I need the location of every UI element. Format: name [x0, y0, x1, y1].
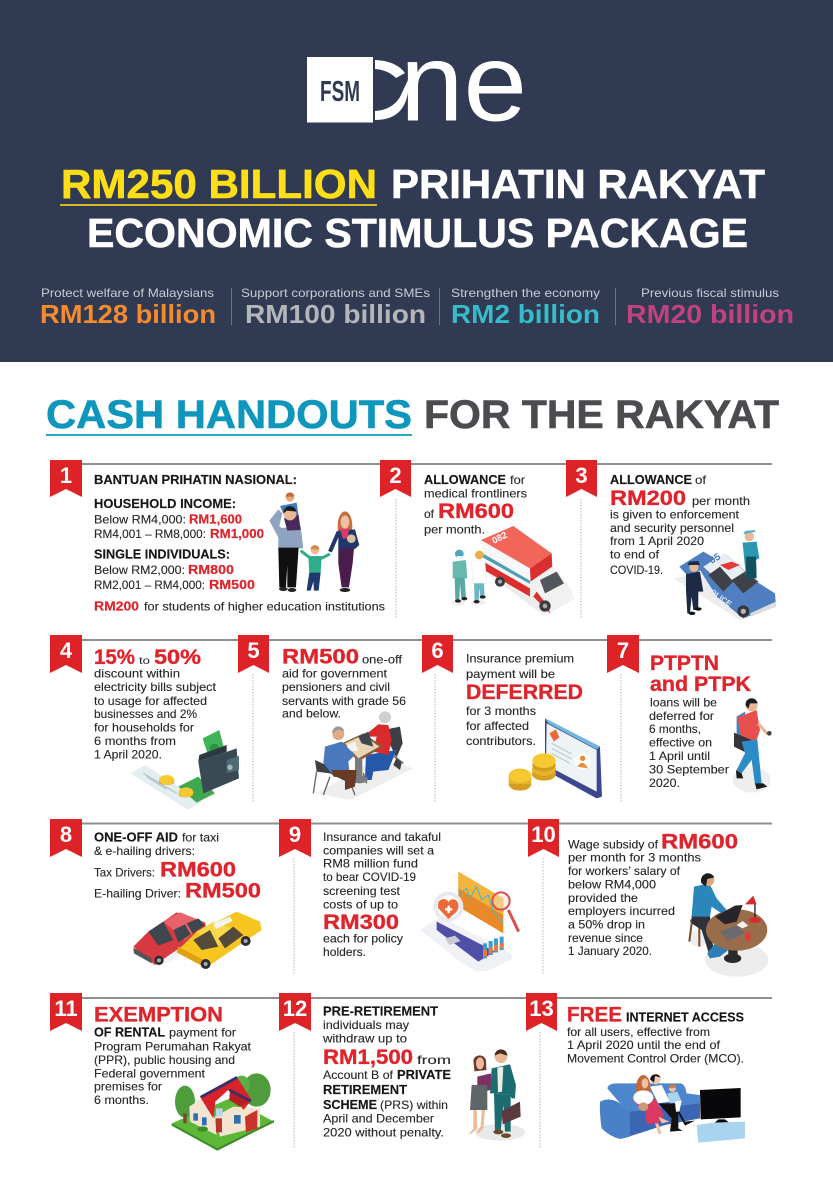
stat: previous stimulus: Previous fiscal stimulus: [641, 287, 779, 300]
text: household and single individual amounts: RM1,000: [210, 526, 264, 541]
text: allowance for medical frontliners: ALLOWANCE: [424, 473, 506, 487]
text: loans deferred: deferred for: [649, 710, 714, 723]
stat: strengthen economy: [451, 287, 600, 329]
text: free internet access: [567, 1004, 744, 1066]
logo: FSM One: ne: [400, 22, 527, 144]
text: electricity discount: 15%: [94, 646, 135, 669]
text: free internet access: Movement Control Order (MCO).: [567, 1053, 744, 1066]
text: loans deferred: [649, 652, 751, 790]
text: one-off aid for pensioners: [282, 646, 406, 721]
text: wage subsidy details: Wage subsidy of: [568, 838, 659, 851]
text: electricity discount: electricity bills subject: [94, 681, 217, 694]
text: allowance for medical frontliners: of: [424, 508, 435, 521]
text: loans deferred: 1 April until: [649, 750, 710, 763]
text: PRS withdrawal: 2020 without penalty.: [323, 1127, 444, 1140]
text: allowance for enforcement personnel: RM200: [610, 487, 686, 510]
text: allowance for medical frontliners: RM600: [438, 500, 514, 523]
text: household and single individual amounts: HOUSEHOLD INCOME:: [94, 497, 236, 511]
text: allowance for enforcement personnel: per month: [692, 495, 750, 508]
text: electricity discount: [94, 646, 217, 762]
text: insurance fund for screening: screening test: [323, 885, 401, 898]
icon: ambulance and doctors: [452, 526, 575, 615]
text: exemption of rental: payment for: [169, 1027, 236, 1040]
ribbon 13: [526, 993, 557, 1031]
text: wage subsidy details: per month for 3 months: [568, 852, 701, 865]
icon: pensioners playing chess: [313, 711, 413, 800]
text: premium deferred: for affected: [466, 720, 529, 733]
text: one-off aid for drivers: & e-hailing drivers:: [94, 845, 195, 858]
text: premium deferred: Insurance premium: [466, 653, 574, 666]
text: PRS withdrawal: RETIREMENT: [323, 1083, 407, 1097]
icon: family: [269, 492, 359, 592]
text: household and single individual amounts: RM800: [188, 562, 234, 577]
ribbon 6: 6: [431, 638, 444, 663]
text: household and single individual amounts: SINGLE INDIVIDUALS:: [94, 548, 230, 562]
text: wage subsidy details: employers incurred: [568, 905, 675, 918]
text: premium deferred: DEFERRED: [466, 681, 583, 704]
text: free internet access: for all users, effective from: [567, 1026, 710, 1039]
ribbon 12: [279, 993, 311, 1031]
text: free internet access: INTERNET ACCESS: [626, 1011, 744, 1025]
text: allowance for enforcement personnel: from 1 April 2020: [610, 535, 704, 548]
text: wage subsidy details: provided the: [568, 892, 638, 905]
ribbon 1: [50, 460, 82, 497]
text: household and single individual amounts: BANTUAN PRIHATIN NASIONAL:: [94, 473, 297, 487]
text: loans deferred: and PTPK: [650, 673, 751, 696]
ribbon 6: [422, 635, 453, 673]
text: insurance fund for screening: companies will set a: [323, 844, 435, 857]
panel 4: electricity discount: [50, 635, 239, 810]
ribbon 5: [238, 635, 269, 673]
text: one-off aid for drivers: E-hailing Driver:: [94, 888, 181, 901]
text: one-off aid for pensioners: servants with grade 56: [282, 695, 406, 708]
text: PRS withdrawal: SCHEME: [323, 1098, 377, 1112]
ribbon 9: 9: [289, 822, 301, 847]
text: insurance fund for screening: [323, 831, 441, 959]
ribbon 10: [528, 819, 559, 857]
text: premium deferred: payment will be: [466, 668, 555, 681]
text: insurance fund for screening: RM8 million fund: [323, 858, 418, 871]
header band: [0, 0, 833, 362]
ribbon 5: 5: [247, 638, 260, 663]
text: wage subsidy details: revenue since: [568, 932, 643, 945]
text: insurance fund for screening: each for policy: [323, 933, 403, 946]
ribbon 13: 13: [529, 996, 554, 1021]
text: household and single individual amounts: RM2,001 – RM4,000:: [94, 579, 205, 592]
ribbon 4: [50, 635, 82, 673]
text: loans deferred: 2020.: [649, 777, 680, 790]
icon: red car and yellow taxi: [133, 912, 262, 969]
stat: support corporations: [241, 287, 430, 329]
panel 8: taxi and e-hailing drivers: [50, 819, 262, 969]
text: insurance fund for screening: Insurance and takaful: [323, 831, 441, 844]
stat: previous stimulus: RM20 billion: [626, 299, 794, 329]
ribbon 4: 4: [60, 638, 73, 663]
text: loans deferred: PTPTN: [650, 652, 719, 675]
ribbon 7: 7: [617, 638, 629, 663]
icon: business couple: [468, 1049, 525, 1141]
text: allowance for enforcement personnel: and security personnel: [610, 522, 734, 535]
ribbon 11: [50, 993, 82, 1031]
text: loans deferred: 6 months,: [649, 723, 701, 736]
text: one-off aid for drivers: Tax Drivers:: [94, 867, 155, 880]
ribbon 7: [607, 635, 639, 673]
text: exemption of rental: [94, 1004, 252, 1107]
stat: support corporations: RM100 billion: [245, 299, 426, 329]
text: exemption of rental: (PPR), public housing and: [94, 1054, 235, 1067]
section heading: FOR THE RAKYAT: [424, 393, 779, 437]
text: premium deferred: [466, 653, 583, 748]
text: one-off aid for drivers: RM500: [185, 880, 261, 903]
icon: house with trees: [172, 1073, 274, 1151]
text: loans deferred: effective on: [649, 737, 712, 750]
text: exemption of rental: premises for: [94, 1081, 162, 1094]
text: exemption of rental: EXEMPTION: [94, 1004, 223, 1027]
text: household and single individual amounts: RM4,001 – RM8,000:: [94, 528, 206, 541]
text: loans deferred: loans will be: [650, 697, 717, 710]
icon: person working at a table: [689, 873, 768, 977]
text: allowance for enforcement personnel: of: [695, 474, 707, 487]
text: electricity discount: 1 April 2020.: [94, 749, 162, 762]
text: household and single individual amounts: Below RM2,000:: [94, 564, 185, 577]
text: exemption of rental: Program Perumahan Rakyat: [94, 1041, 252, 1054]
text: wage subsidy details: [568, 830, 738, 958]
text: PRS withdrawal: Account B of: [323, 1069, 394, 1082]
text: exemption of rental: 6 months.: [94, 1094, 149, 1107]
text: one-off aid for drivers: [94, 831, 261, 903]
text: PRS withdrawal: RM1,500: [323, 1046, 413, 1069]
text: household and single individual amounts: for students of higher education institutions: [144, 601, 385, 614]
stat: protect welfare: [40, 287, 216, 329]
text: electricity discount: discount within: [94, 668, 180, 681]
text: allowance for medical frontliners: for: [510, 474, 525, 487]
text: insurance fund for screening: costs of up to: [323, 898, 398, 911]
icon: family watching TV on a sofa: [600, 1074, 745, 1143]
text: PRS withdrawal: April and December: [323, 1113, 434, 1126]
panel 1: Bantuan Prihatin Nasional: [50, 460, 385, 614]
ribbon 8: 8: [60, 822, 72, 847]
ribbon 3: 3: [575, 463, 588, 488]
text: exemption of rental: OF RENTAL: [94, 1026, 165, 1040]
text: premium deferred: contributors.: [466, 735, 536, 748]
text: free internet access: FREE: [567, 1004, 622, 1027]
logo: FSM One: [307, 22, 527, 144]
text: free internet access: 1 April 2020 until the end of: [567, 1039, 721, 1052]
text: insurance fund for screening: RM300: [323, 911, 399, 934]
text: PRS withdrawal: from: [417, 1054, 451, 1067]
ribbon 10: 10: [531, 822, 556, 847]
ribbon 11: 11: [54, 996, 78, 1021]
text: household and single individual amounts: [94, 473, 385, 614]
text: wage subsidy details: for workers’ salary of: [568, 865, 681, 878]
panel 12: pre-retirement withdrawal: [279, 993, 525, 1141]
text: electricity discount: 50%: [154, 646, 201, 669]
text: one-off aid for pensioners: pensioners and civil: [282, 681, 390, 694]
icon: wallet, cash and coins: [131, 730, 239, 810]
icon: insurance tablet and coins: [509, 718, 602, 798]
panel 13: free internet access: [526, 993, 745, 1143]
text: one-off aid for pensioners: one-off: [362, 654, 403, 666]
text: loans deferred: 30 September: [649, 764, 729, 777]
text: one-off aid for pensioners: and below.: [282, 708, 341, 721]
text: wage subsidy details: a 50% drop in: [568, 918, 645, 931]
panel 9: COVID-19 screening fund: [279, 819, 519, 972]
text: allowance for medical frontliners: per month.: [424, 524, 485, 536]
text: electricity discount: for households for: [94, 722, 194, 735]
stat: strengthen economy: RM2 billion: [451, 299, 600, 329]
icon: police car and officers: [673, 530, 777, 620]
text: wage subsidy details: RM600: [661, 830, 738, 853]
panel 7: PTPTN and PTPK: [607, 635, 772, 793]
text: allowance for medical frontliners: medical frontliners: [424, 488, 527, 501]
ribbon 3: [566, 460, 597, 497]
text: PRS withdrawal: individuals may: [323, 1019, 409, 1032]
text: allowance for enforcement personnel: [610, 473, 750, 577]
text: electricity discount: to: [139, 655, 150, 667]
text: PRS withdrawal: PRIVATE: [397, 1068, 451, 1082]
text: electricity discount: 6 months from: [94, 735, 176, 748]
text: PRS withdrawal: (PRS) within: [380, 1099, 448, 1112]
text: premium deferred: for 3 months: [466, 705, 536, 718]
text: one-off aid for drivers: for taxi: [182, 832, 219, 845]
text: one-off aid for drivers: RM600: [160, 859, 236, 882]
text: household and single individual amounts: RM200: [94, 599, 139, 614]
text: allowance for enforcement personnel: COVID-19.: [610, 564, 663, 577]
text: PRS withdrawal: [322, 1005, 451, 1140]
text: household and single individual amounts: RM500: [209, 577, 255, 592]
ribbon 1: 1: [60, 463, 72, 488]
text: household and single individual amounts: RM1,600: [189, 512, 242, 526]
title: PRIHATIN RAKYAT: [391, 161, 765, 207]
icon: ambulance and doctors: 082: [490, 530, 509, 546]
text: one-off aid for pensioners: RM500: [282, 646, 359, 668]
logo: FSM One: FSM: [320, 76, 360, 108]
icon: laptop with heart rate screening: [420, 872, 519, 972]
ribbon 8: [50, 819, 82, 857]
section heading: [46, 393, 779, 437]
icon: police car and officers: 05: [708, 551, 723, 567]
panel 10: wage subsidy: [528, 819, 768, 977]
section heading: CASH HANDOUTS: [46, 393, 412, 437]
ribbon 9: [279, 819, 311, 857]
text: wage subsidy details: below RM4,000: [568, 878, 656, 891]
stat: protect welfare: Protect welfare of Malaysians: [41, 287, 214, 300]
ribbon 2: [380, 460, 411, 497]
panel 5: pensioners aid: [238, 635, 413, 800]
text: PRS withdrawal: PRE-RETIREMENT: [323, 1005, 438, 1019]
icon: police car and officers: POLICE: [704, 584, 734, 609]
text: household and single individual amounts: Below RM4,000:: [94, 514, 186, 526]
ribbon 12: 12: [283, 996, 307, 1021]
text: allowance for enforcement personnel: ALLOWANCE: [610, 473, 692, 487]
text: wage subsidy details: 1 January 2020.: [568, 945, 652, 958]
icon: student walking: [733, 698, 772, 793]
panel 2: medical frontliners: [380, 460, 575, 615]
text: electricity discount: to usage for affected: [94, 695, 207, 708]
stat: protect welfare: RM128 billion: [40, 299, 216, 329]
title: RM250 BILLION: [61, 161, 377, 207]
stat: support corporations: Support corporations and SMEs: [241, 287, 430, 300]
text: electricity discount: businesses and 2%: [94, 708, 197, 721]
text: insurance fund for screening: to bear COVID-19: [323, 871, 416, 884]
stat: previous stimulus: [626, 287, 794, 329]
text: allowance for enforcement personnel: is given to enforcement: [610, 508, 740, 522]
text: insurance fund for screening: holders.: [323, 946, 366, 959]
title: [60, 161, 765, 256]
text: one-off aid for pensioners: aid for government: [282, 668, 388, 681]
stat: strengthen economy: Strengthen the economy: [451, 287, 600, 300]
text: allowance for medical frontliners: [424, 473, 527, 536]
text: exemption of rental: Federal government: [94, 1068, 206, 1081]
title: ECONOMIC STIMULUS PACKAGE: [87, 210, 748, 256]
text: one-off aid for drivers: ONE-OFF AID: [94, 831, 178, 845]
panel 3: enforcement allowance: [566, 460, 777, 620]
panel 11: exemption of rental: [50, 993, 274, 1151]
text: allowance for enforcement personnel: to end of: [610, 549, 660, 562]
ribbon 2: 2: [389, 463, 402, 488]
panel 6: insurance premium deferred: [422, 635, 602, 798]
text: PRS withdrawal: withdraw up to: [322, 1033, 407, 1046]
